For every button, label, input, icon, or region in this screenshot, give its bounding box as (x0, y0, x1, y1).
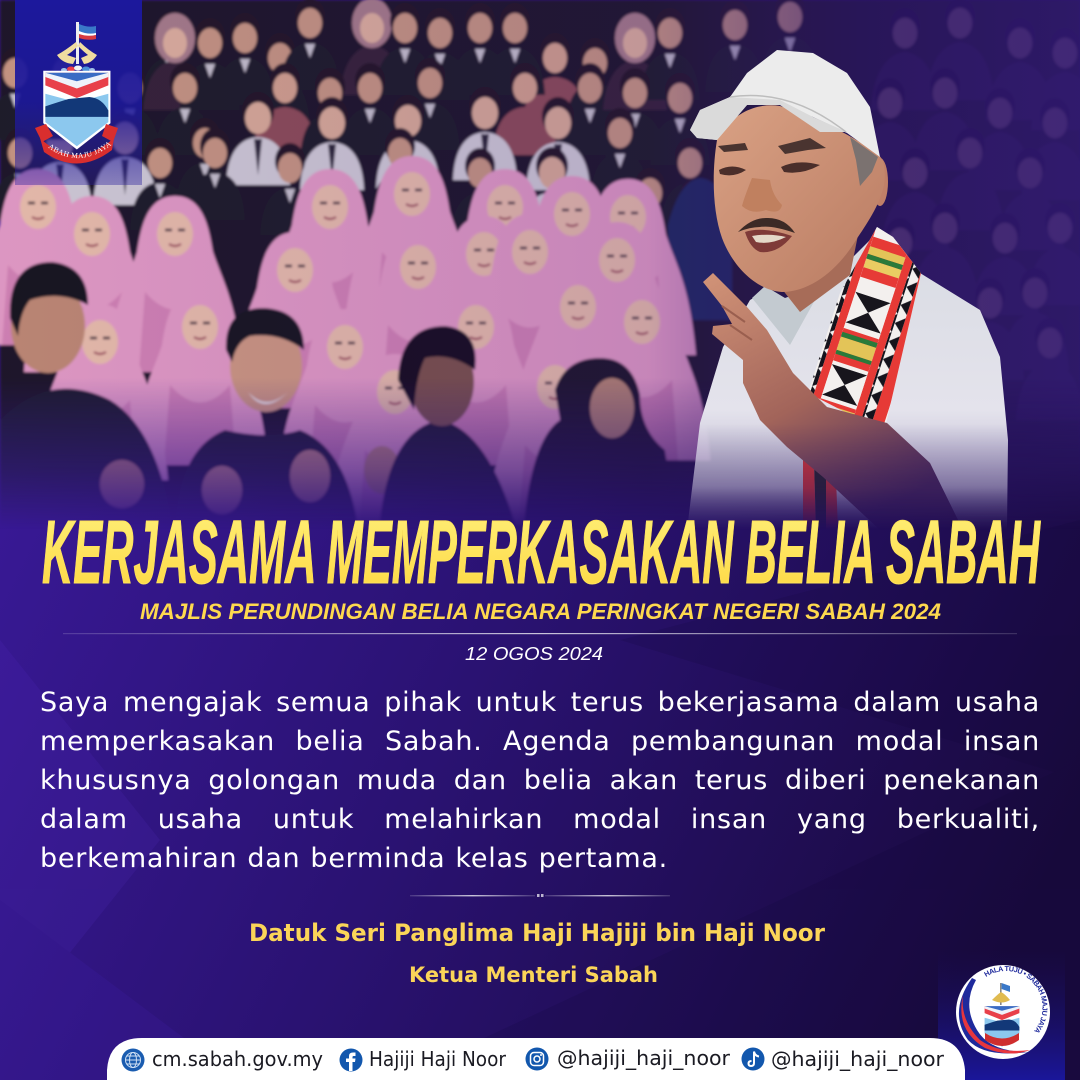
website: cm.sabah.gov.my (152, 1047, 323, 1071)
panel: bottom-right logo backdrop (938, 950, 1065, 1080)
crowd: back rows (0, 0, 804, 220)
crowd photo (0, 0, 1080, 540)
ornament divider (410, 894, 670, 897)
signatory name: Datuk Seri Panglima Haji Hajiji bin Haji Noor (249, 919, 825, 947)
quote text block: Saya mengajak semua pihak untuk terus bekerjasama dalam usaha (40, 687, 1040, 718)
crowd: navy uniform figure (668, 178, 732, 320)
logo: Hala Tuju Sabah Maju Jaya (956, 965, 1050, 1059)
date: 12 OGOS 2024 (465, 643, 603, 664)
icon: facebook (340, 1048, 362, 1072)
quote text block: dalam usaha untuk melahirkan modal insan yang berkualiti, (40, 804, 1040, 835)
crowd: pink hijab rows (0, 156, 710, 530)
man: nose (742, 178, 782, 212)
man: collar (752, 287, 814, 345)
man: lower scarf (803, 460, 838, 524)
man: eyes (719, 162, 820, 175)
man: brows (718, 138, 826, 154)
instagram handle: @hajiji_haji_noor (557, 1046, 731, 1070)
divider line (63, 633, 1017, 634)
man: mouth (745, 230, 792, 252)
man: cap (690, 50, 880, 157)
man: shirt (687, 230, 1008, 530)
quote text block: memperkasakan belia Sabah. Agenda pembangunan modal insan (40, 726, 1040, 757)
panel: top-left logo backdrop (15, 0, 142, 185)
background: decorative facets (0, 520, 1080, 1080)
man: portrait (687, 50, 1008, 530)
quote text block: khususnya golongan muda dan belia akan terus diberi penekanan (40, 765, 1040, 796)
icon: instagram (526, 1048, 548, 1070)
man: moustache (738, 218, 795, 233)
icon: Sabah coat of arms (35, 22, 118, 164)
quote text block: berkemahiran dan berminda kelas pertama. (40, 843, 668, 874)
man: face (714, 105, 885, 292)
icon: globe (122, 1048, 144, 1072)
facebook name: Hajiji Haji Noor (369, 1047, 507, 1071)
colour tint over photo (0, 0, 1080, 540)
man: ear (877, 158, 888, 206)
crowd: front row officials (0, 262, 680, 540)
man: neck (784, 238, 858, 312)
footer bar (107, 1038, 965, 1080)
crowd: right side (874, 7, 1078, 359)
man: raised hand and arm (703, 273, 963, 530)
man: scarf (810, 227, 921, 422)
subtitle: MAJLIS PERUNDINGAN BELIA NEGARA PERINGKAT NEGERI SABAH 2024 (140, 599, 941, 624)
man: hair (850, 137, 878, 186)
signatory role: Ketua Menteri Sabah (409, 963, 658, 987)
icon: tiktok (742, 1048, 764, 1070)
tiktok handle: @hajiji_haji_noor (771, 1047, 945, 1071)
logo: Hala Tuju Sabah Maju Jaya: HALA TUJU • SABAH MAJU JAYA (984, 966, 1048, 1032)
